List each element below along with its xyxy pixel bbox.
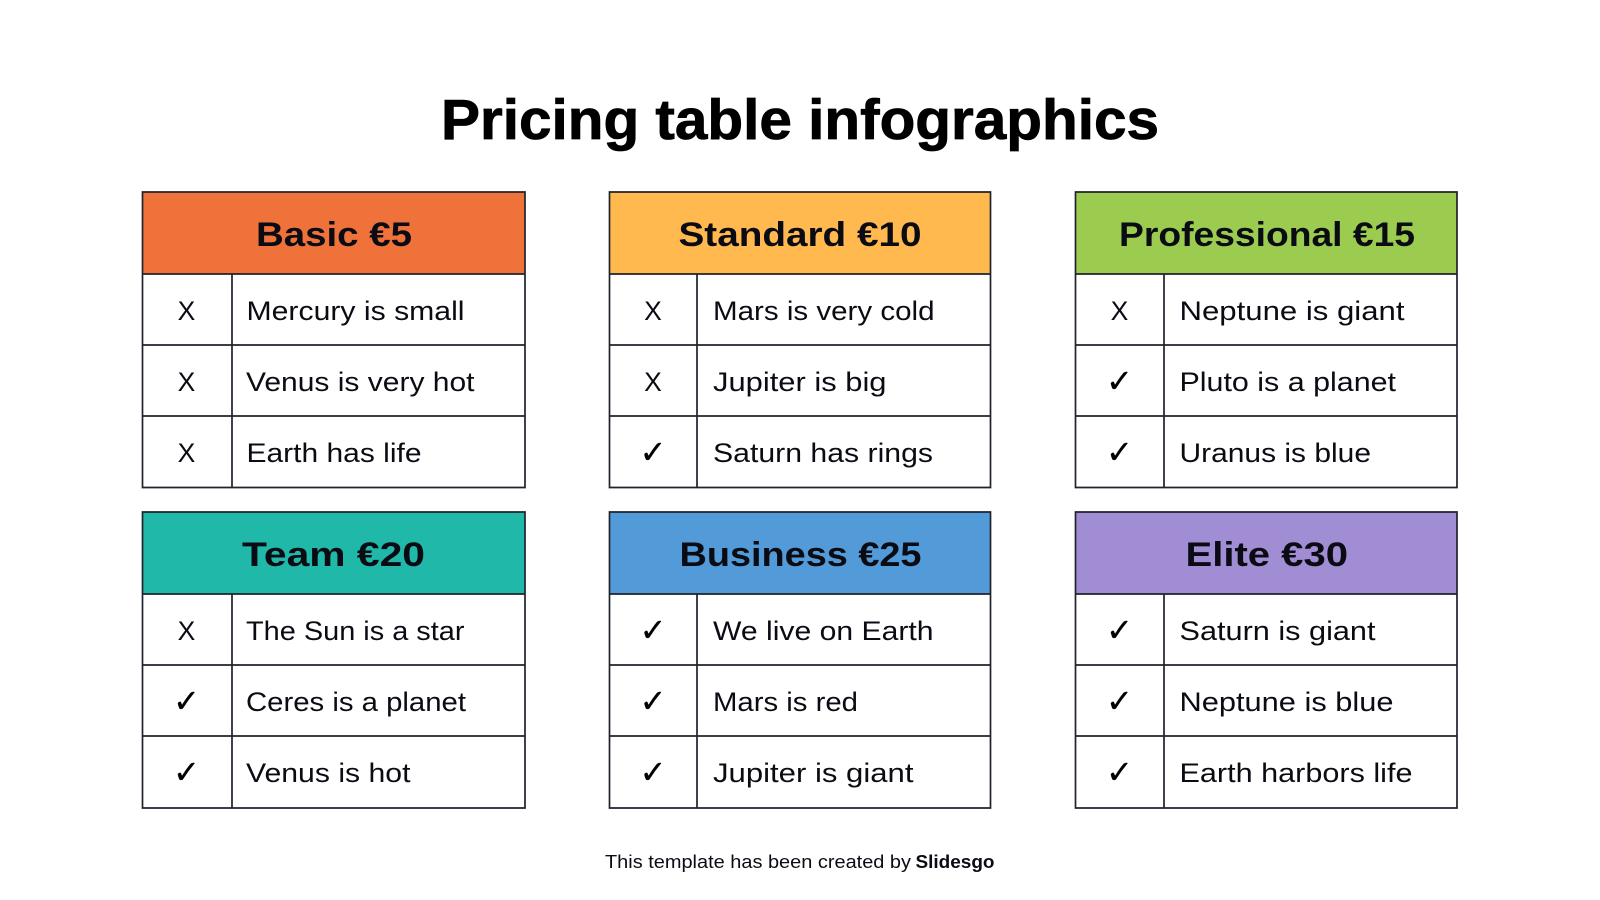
table grid: Team: [142, 512, 525, 808]
row: Neptune is giant: Neptune is giant: [1180, 296, 1405, 326]
panel: Elite plan: [1076, 512, 1457, 808]
row: Earth has life: X: [178, 438, 196, 468]
row: The Sun is a star: [178, 616, 465, 646]
row: Saturn is giant: Saturn is giant: [1180, 616, 1376, 646]
row: Pluto is a planet: ✓: [1106, 362, 1133, 400]
table grid: Professional: [1076, 192, 1457, 488]
row: Pluto is a planet: Pluto is a planet: [1180, 367, 1397, 397]
row: Neptune is blue: [1106, 682, 1394, 720]
row: Jupiter is giant: ✓: [640, 753, 666, 791]
row: We live on Earth: We live on Earth: [713, 616, 934, 646]
row: Ceres is a planet: ✓: [173, 682, 200, 720]
header: Elite €30: Elite €30: [1186, 536, 1348, 574]
row: Venus is hot: ✓: [173, 753, 200, 791]
row: Saturn has rings: ✓: [640, 433, 666, 471]
row: Neptune is blue: ✓: [1106, 682, 1133, 720]
row: Neptune is blue: Neptune is blue: [1180, 687, 1394, 717]
row: Mars is red: Mars is red: [713, 687, 858, 717]
row: Mars is red: ✓: [640, 682, 666, 720]
panel: Team plan: [142, 512, 525, 808]
row: Earth harbors life: ✓: [1106, 753, 1133, 791]
row: Venus is very hot: X: [178, 367, 196, 397]
row: Ceres is a planet: Ceres is a planet: [246, 687, 467, 717]
row: Saturn has rings: Saturn has rings: [713, 438, 933, 468]
row: Venus is very hot: Venus is very hot: [246, 367, 475, 397]
row: Saturn has rings: [640, 433, 933, 471]
row: Jupiter is big: [644, 367, 886, 397]
header: Business €25: Business €25: [680, 536, 922, 574]
header: Standard €10: [610, 192, 990, 274]
row: Mars is red: [640, 682, 858, 720]
row: Jupiter is big: X: [644, 367, 662, 397]
row: Neptune is giant: X: [1111, 296, 1129, 326]
row: Venus is hot: [173, 753, 411, 791]
panel: Standard plan: [610, 192, 990, 488]
header: Business €25: [610, 512, 990, 594]
panel: Professional plan: [1076, 192, 1457, 488]
footer credit: Slidesgo: [916, 852, 995, 872]
row: Uranus is blue: [1106, 433, 1371, 471]
header: Standard €10: Standard €10: [678, 216, 922, 254]
row: Ceres is a planet: [173, 682, 467, 720]
panel: Basic plan: [142, 192, 525, 488]
row: Uranus is blue: Uranus is blue: [1180, 438, 1371, 468]
row: Earth harbors life: [1106, 753, 1412, 791]
row: Pluto is a planet: [1106, 362, 1397, 400]
row: Jupiter is giant: Jupiter is giant: [713, 758, 914, 788]
header: Team €20: Team €20: [242, 536, 425, 574]
header: Professional €15: [1076, 192, 1457, 274]
header: Elite €30: [1076, 512, 1457, 594]
header: Basic €5: Basic €5: [256, 216, 412, 254]
table grid: Basic: [142, 192, 525, 488]
row: Mars is very cold: X: [644, 296, 662, 326]
row: We live on Earth: ✓: [640, 611, 666, 649]
row: Uranus is blue: ✓: [1106, 433, 1133, 471]
table grid: Elite: [1076, 512, 1457, 808]
panel: Business plan: [610, 512, 990, 808]
header: Team €20: [142, 512, 525, 594]
row: Jupiter is big: Jupiter is big: [713, 367, 886, 397]
row: Venus is very hot: [178, 367, 475, 397]
table grid: Business: [610, 512, 990, 808]
header: Professional €15: Professional €15: [1119, 216, 1415, 254]
row: The Sun is a star: The Sun is a star: [246, 616, 465, 646]
row: Neptune is giant: [1111, 296, 1405, 326]
row: The Sun is a star: X: [178, 616, 196, 646]
row: Saturn is giant: [1106, 611, 1376, 649]
row: Mercury is small: Mercury is small: [246, 296, 464, 326]
row: Earth has life: [178, 438, 422, 468]
row: Mars is very cold: [644, 296, 934, 326]
title: Pricing table infographics: [441, 88, 1159, 152]
row: Earth has life: Earth has life: [246, 438, 422, 468]
row: Mars is very cold: Mars is very cold: [713, 296, 934, 326]
table grid: Standard: [610, 192, 990, 488]
row: Mercury is small: [178, 296, 464, 326]
row: We live on Earth: [640, 611, 934, 649]
row: Venus is hot: Venus is hot: [246, 758, 411, 788]
header: Basic €5: [142, 192, 525, 274]
footer credit: This template has been created by: [605, 852, 911, 872]
row: Mercury is small: X: [178, 296, 196, 326]
row: Earth harbors life: Earth harbors life: [1180, 758, 1412, 788]
row: Jupiter is giant: [640, 753, 914, 791]
row: Saturn is giant: ✓: [1106, 611, 1133, 649]
